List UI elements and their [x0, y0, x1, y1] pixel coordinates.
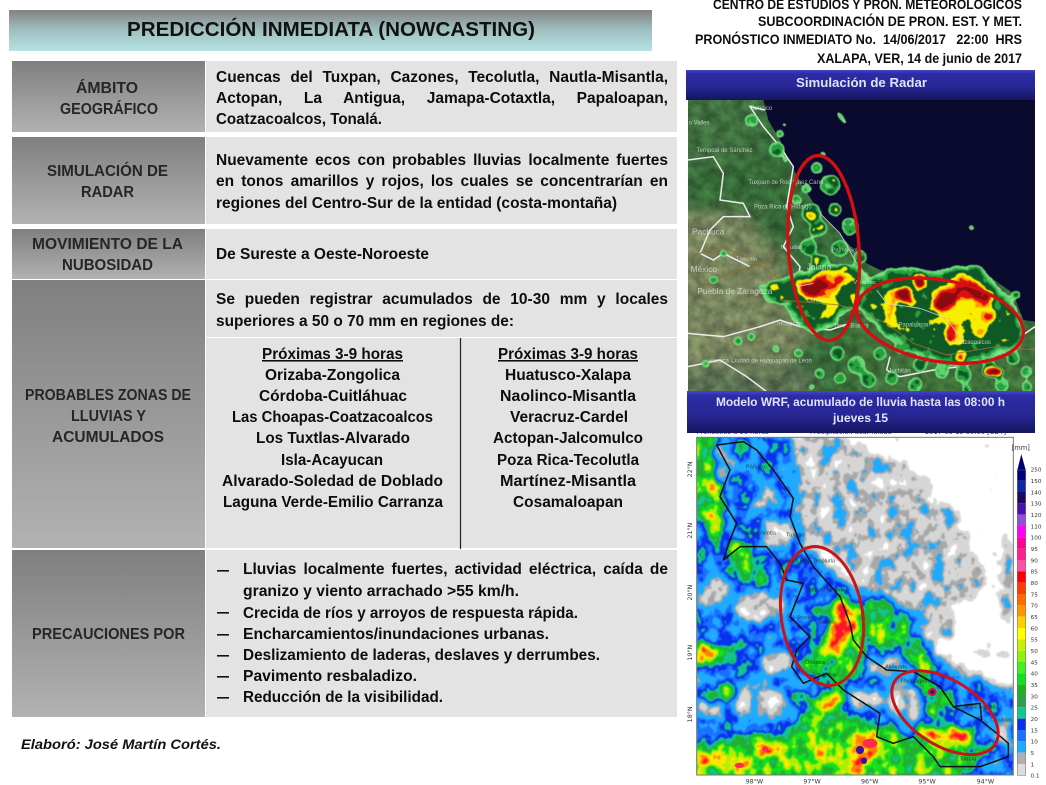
colour scale legend: 1	[1031, 762, 1035, 768]
axis labels: 22°N	[686, 461, 694, 477]
list: first column of regions	[222, 346, 443, 511]
colour scale legend: 95	[1031, 547, 1038, 553]
map place names: Juchitán	[888, 368, 911, 374]
panel: simulación de radar: Nuevamente ecos con probables lluvias localmente fuertes	[216, 152, 668, 169]
panel: simulación de radar: regiones del Centro-Sur de la entidad (costa-montaña)	[216, 195, 617, 212]
list: second column of regions: Veracruz-Cardel	[510, 409, 628, 426]
list: first column of regions: Los Tuxtlas-Alvarado	[256, 430, 410, 447]
banner: simulación de radar	[686, 70, 1035, 100]
colour scale legend: 50	[1031, 649, 1038, 655]
WRF rainfall model map: Precipitación acumulada	[810, 428, 892, 436]
panel: precauciones por: PRECAUCIONES POR	[32, 626, 185, 643]
map place names: Veracruz	[853, 280, 876, 286]
place names: Perote	[797, 615, 814, 621]
yellow cells	[769, 177, 1004, 378]
red cells	[802, 276, 1001, 375]
place names: Coatzacoalcos	[958, 704, 996, 710]
map place names: Puebla de Zaragoza	[697, 286, 773, 296]
map place names: Papaloapan	[898, 323, 930, 329]
colour scale legend: 10	[1031, 740, 1038, 746]
panel: ámbito geográfico: Cuencas del Tuxpan, Cazones, Tecolutla, Nautla-Misantla,	[216, 69, 668, 86]
map place names: Tuxpam de Rodríguez Cano	[748, 180, 824, 186]
map place names: Pachuca	[692, 227, 725, 237]
banner: modelo WRF: jueves 15	[832, 411, 888, 425]
scattered low-level echoes	[828, 345, 845, 362]
axis labels: 21°N	[686, 522, 694, 539]
colour scale legend: 70	[1031, 604, 1038, 610]
heavy rain cores	[698, 479, 973, 777]
colour scale legend: 15	[1031, 728, 1038, 734]
orange cells	[805, 213, 1003, 376]
radar simulation map	[688, 100, 1035, 391]
axis labels: 20°N	[686, 584, 694, 601]
map place names: Coatzacoalcos	[952, 340, 991, 346]
map place names: Tehuacán	[776, 322, 802, 328]
panel: movimiento de la nubosidad: NUBOSIDAD	[62, 257, 153, 274]
colour scale legend: 150	[1031, 479, 1042, 485]
panel: ámbito geográfico: ÁMBITO	[76, 78, 138, 97]
list: second column of regions: Actopan-Jalcomulco	[493, 430, 643, 447]
panel: precauciones por: Crecida de ríos y arroyos de respuesta rápida.	[243, 605, 578, 622]
isolated cells	[700, 102, 1034, 396]
panel: probables zonas de lluvias y acumulados: Se pueden registrar acumulados de 10-30 mm y locales	[216, 291, 668, 308]
panel: precauciones por: Lluvias localmente fuertes, actividad eléctrica, caída de	[243, 561, 668, 578]
dry patches	[698, 448, 1008, 747]
place names: Zongolica	[812, 673, 837, 679]
panel: probables zonas de lluvias y acumulados: superiores a 50 o 70 mm en regiones de:	[216, 313, 514, 330]
place names: Poza Rica-Tecolutla	[785, 559, 836, 565]
map place names: Córdoba	[807, 298, 829, 304]
list: first column of regions: Alvarado-Soledad de Doblado	[222, 473, 443, 490]
colour scale legend: 25	[1031, 706, 1038, 712]
colour scale legend: 5	[1031, 751, 1035, 757]
axis labels	[686, 461, 995, 785]
list: second column of regions: Poza Rica-Tecolutla	[497, 452, 639, 469]
panel: ámbito geográfico	[12, 61, 677, 132]
place names: Pánuco	[746, 465, 765, 471]
colour scale legend: 110	[1031, 524, 1042, 530]
panel: simulación de radar: en tonos amarillos y rojos, los cuales se concentrarían en	[216, 173, 668, 190]
map place names: Heroica Ciudad de Huajuapan de León	[708, 359, 812, 365]
colour scale legend: 45	[1031, 660, 1038, 666]
panel: probables zonas de lluvias y acumulados	[12, 280, 677, 549]
panel: movimiento de la nubosidad	[12, 229, 677, 279]
map place names: Jalapa	[807, 261, 832, 271]
colour scale legend: 250	[1031, 468, 1042, 474]
WRF rainfall model map: Pronóstico a 36 horas	[697, 428, 769, 436]
colour scale legend: 80	[1031, 581, 1038, 587]
colour scale legend: [mm]	[1012, 444, 1030, 452]
panel: ámbito geográfico: Actopan, La Antigua, Jamapa-Cotaxtla, Papaloapan,	[216, 90, 668, 107]
panel: simulación de radar	[12, 137, 677, 224]
colour scale legend: 55	[1031, 638, 1038, 644]
place names: Tuxpan	[786, 533, 805, 539]
place names: Tlacotalpan	[900, 679, 929, 685]
map place names: México	[691, 264, 717, 274]
colour scale legend: 140	[1031, 490, 1042, 496]
list: first column of regions: Isla-Acayucan	[281, 452, 383, 469]
list: second column of regions: Huatusco-Xalapa	[505, 367, 631, 384]
colour scale legend: 0.1	[1031, 773, 1040, 779]
colour scale legend: 75	[1031, 592, 1038, 598]
blue rain over land	[697, 438, 1013, 774]
panel: probables zonas de lluvias y acumulados: PROBABLES ZONAS DE	[25, 387, 191, 404]
title bar: PREDICCIÓN INMEDIATA (NOWCASTING)	[127, 17, 535, 41]
colour scale legend: 120	[1031, 513, 1042, 519]
colour scale legend: 60	[1031, 626, 1038, 632]
WRF rainfall model map	[688, 433, 1042, 784]
red ellipses: highlighted zones	[771, 540, 1013, 772]
map place names: Tampico	[750, 106, 773, 112]
coast and state borders	[717, 442, 1008, 767]
map place names: o Valles	[689, 121, 710, 127]
header: institution and forecast info: XALAPA, VER, 14 de junio de 2017	[817, 50, 1022, 66]
gray drizzle area north-east	[795, 420, 988, 640]
list: second column of regions	[493, 346, 643, 511]
red ellipses: highlighted zones	[782, 153, 1030, 375]
header: institution and forecast info: SUBCOORDINACIÓN DE PRON. EST. Y MET.	[758, 12, 1022, 29]
colour scale legend: 65	[1031, 615, 1038, 621]
list: second column of regions: Martínez-Misantla	[500, 473, 636, 490]
place names: Choapas	[990, 718, 1013, 724]
place names: Alvarado	[885, 665, 907, 671]
list: first column of regions: Las Choapas-Coatzacoalcos	[232, 409, 433, 426]
axis labels: 19°N	[686, 644, 694, 661]
panel: probables zonas de lluvias y acumulados: ACUMULADOS	[52, 429, 164, 446]
panel: movimiento de la nubosidad: MOVIMIENTO DE LA	[32, 236, 183, 253]
precipitation echoes	[701, 112, 1033, 391]
map place names: Tempoal de Sánchez	[697, 148, 753, 154]
rain field	[697, 438, 1013, 774]
banner: simulación de radar: Simulación de Radar	[796, 75, 927, 90]
panel: ámbito geográfico: Coatzacoalcos, Tonalá.	[216, 111, 382, 128]
map place names: Teziutlán	[780, 245, 802, 251]
colour scale legend: 30	[1031, 694, 1038, 700]
place names	[742, 465, 1013, 763]
land relief	[688, 100, 1035, 391]
panel: probables zonas de lluvias y acumulados: LLUVIAS Y	[71, 408, 146, 425]
colour scale legend: 20	[1031, 717, 1038, 723]
header: institution and forecast info	[695, 0, 1022, 66]
panel: precauciones por: Reducción de la visibilidad.	[243, 689, 443, 706]
axis labels: 18°N	[686, 706, 694, 722]
panel: ámbito geográfico: GEOGRÁFICO	[60, 99, 158, 118]
panel: precauciones por	[12, 550, 677, 717]
banner: modelo WRF: Modelo WRF, acumulado de lluvia hasta las 08:00 h	[716, 395, 1005, 409]
list: second column of regions: Próximas 3-9 horas	[498, 346, 638, 363]
banner: modelo WRF	[687, 391, 1035, 433]
overlaid roads	[797, 213, 963, 338]
panel: precauciones por: granizo y viento arrachado >55 km/h.	[243, 583, 519, 600]
panel: simulación de radar: SIMULACIÓN DE	[47, 161, 168, 180]
panel: simulación de radar: RADAR	[81, 184, 134, 201]
list: second column of regions: Cosamaloapan	[513, 494, 623, 511]
main echo mass south	[853, 267, 1023, 365]
list: first column of regions: Laguna Verde-Emilio Carranza	[223, 494, 443, 511]
list: first column of regions: Córdoba-Cuitláhuac	[259, 388, 407, 405]
colour scale legend: 100	[1031, 536, 1042, 542]
state boundaries and roads	[688, 107, 1035, 392]
place names: Huayacocotla	[742, 531, 777, 537]
title bar	[9, 10, 652, 51]
place names: Orizaba	[805, 660, 826, 666]
place names: Mtz de la Torre	[808, 588, 846, 594]
panel: precauciones por: Pavimento resbaladizo.	[243, 668, 417, 685]
panel: precauciones por: Encharcamientos/inundaciones urbanas.	[243, 626, 549, 643]
colour scale legend: 40	[1031, 672, 1038, 678]
strongest cells	[863, 739, 877, 748]
colour scale legend: 90	[1031, 558, 1038, 564]
central echo mass	[760, 265, 867, 333]
map place names: Tlaxcala	[736, 257, 758, 263]
list: first column of regions: Orizaba-Zongolica	[265, 367, 400, 384]
list: second column of regions: Naolinco-Misantla	[500, 388, 636, 405]
colour scale legend: 85	[1031, 570, 1038, 576]
place names: Xalapa	[817, 619, 836, 625]
sea	[763, 100, 1035, 322]
map place names: Palma Sola	[832, 248, 861, 254]
WRF rainfall model map: 2017-06-15 08:00 [CDT]	[925, 428, 1007, 436]
colour scale legend: 130	[1031, 502, 1042, 508]
map place names: Tierra Blanca	[833, 323, 869, 329]
green rain zones	[697, 438, 994, 774]
map place names: Poza Rica de Hidalgo	[754, 204, 812, 210]
place names: Tonalá	[959, 757, 977, 763]
panel: movimiento de la nubosidad: De Sureste a Oeste-Noroeste	[216, 246, 429, 263]
map place names	[689, 106, 991, 374]
colour scale legend	[1012, 444, 1042, 779]
colour scale legend: 35	[1031, 683, 1038, 689]
list: first column of regions: Próximas 3-9 horas	[262, 346, 403, 363]
author credit: Elaboró: José Martín Cortés.	[21, 736, 221, 752]
panel: precauciones por: Deslizamiento de laderas, deslaves y derrumbes.	[243, 647, 600, 664]
